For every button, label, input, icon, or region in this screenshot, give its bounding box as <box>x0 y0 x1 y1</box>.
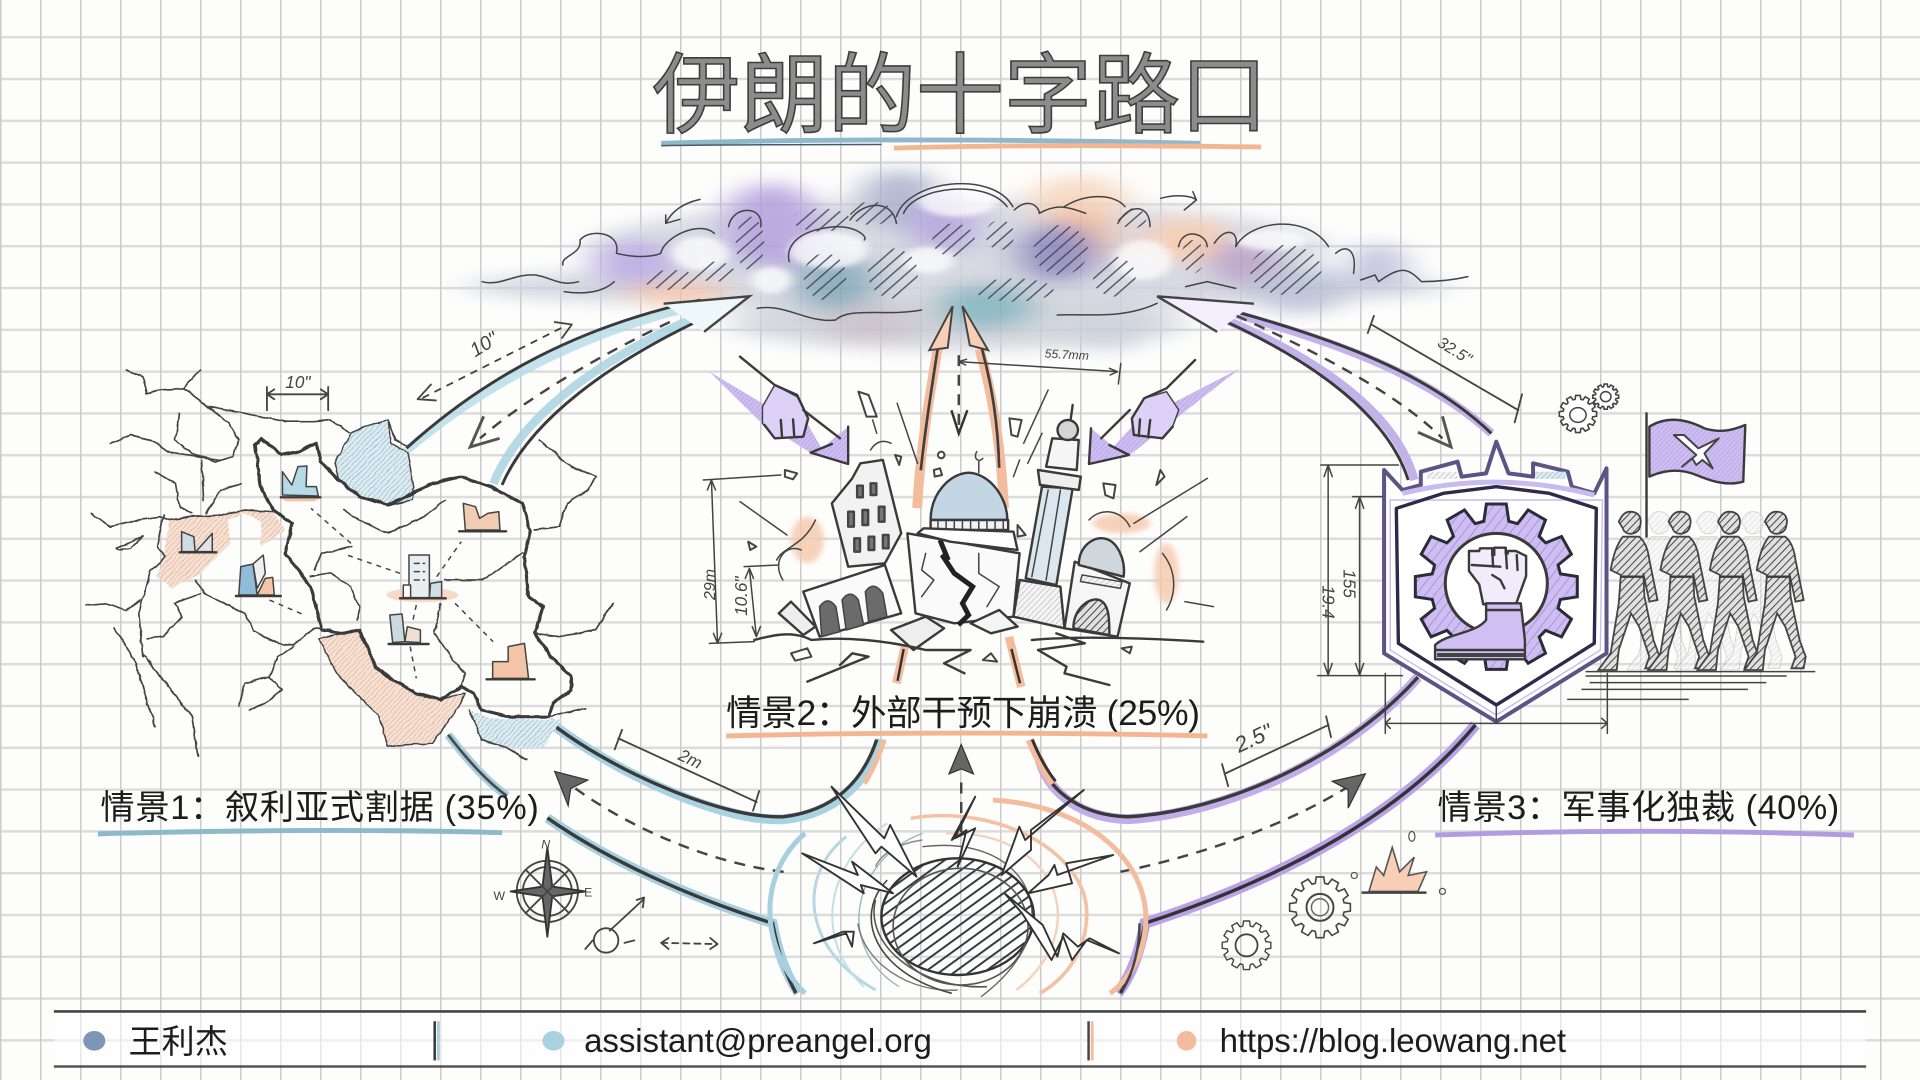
small explosion sketch <box>1351 831 1446 894</box>
top width dimension <box>958 359 1121 384</box>
ruined tower <box>832 460 901 567</box>
main dome <box>918 452 1018 550</box>
compass rose: W <box>493 889 505 903</box>
flag <box>1647 413 1745 537</box>
scenario 1 label: 情景1：叙利亚式割据 (35%) <box>100 789 539 827</box>
scenario 3 dimension labels: 19.4 <box>1318 585 1338 619</box>
ground lines <box>1568 672 1815 699</box>
dimension labels scenario 2: 10.6" <box>731 576 751 616</box>
region hatch: Gulf <box>318 630 465 747</box>
dimension labels around arrows: 2.5" <box>1230 718 1277 758</box>
arched hall <box>803 565 901 637</box>
shield <box>1384 442 1607 722</box>
small mosque <box>1064 538 1130 637</box>
region hatch: Oman <box>469 710 561 748</box>
footer: email: assistant@preangel.org <box>584 1023 932 1060</box>
small probe sketch and dashed arrow <box>585 898 718 953</box>
footer bar <box>54 1011 1866 1067</box>
compass rose <box>493 838 592 937</box>
rubble and ground cracks <box>748 390 1203 685</box>
gear emblem <box>1415 504 1577 669</box>
dimension labels scenario 2: 55.7mm <box>1044 347 1089 363</box>
central crisis core <box>770 787 1146 997</box>
scenario 3 dimension labels <box>1318 569 1359 619</box>
storm cloud at top <box>464 170 1468 350</box>
minaret <box>1026 405 1081 585</box>
internal flow arrows <box>269 508 493 678</box>
panel: scenario 2 collapsing mosque city <box>703 357 1240 685</box>
dimension labels around arrows: 10" <box>466 327 503 362</box>
Iran border <box>255 438 571 717</box>
dimension labels around arrows <box>267 316 1522 811</box>
dimension labels around arrows: 2m <box>675 744 705 773</box>
dashed flow arrows <box>470 316 1451 872</box>
right purple arrow and fist <box>1089 360 1240 464</box>
scenario 3 connector arrows (purple) <box>1040 296 1491 993</box>
compass rose: E <box>584 885 592 899</box>
pressure rings <box>770 800 1146 997</box>
marching soldiers <box>1598 512 1806 670</box>
scenario 2 label: 情景2：外部干预下崩溃 (25%) <box>726 693 1200 733</box>
title: 伊朗的十字路口 <box>652 46 1268 145</box>
dimension labels scenario 2: 29m <box>702 569 719 601</box>
footer: author: 王利杰 <box>129 1024 228 1061</box>
footer: website: https://blog.leowang.net <box>1220 1023 1566 1060</box>
scenario 2 connector arrows (orange) <box>864 306 1056 784</box>
region hatch: Caspian <box>335 420 414 505</box>
dimension labels around arrows: 10" <box>285 372 311 392</box>
scenario 3 label: 情景3：军事化独裁 (40%) <box>1438 789 1839 827</box>
panel: scenario 3 shield and marching soldiers <box>1318 384 1815 733</box>
dimension labels scenario 2 <box>702 347 1089 616</box>
dimension labels around arrows: 32.5" <box>1434 334 1475 369</box>
small gears <box>1559 384 1619 433</box>
orange blast clouds <box>791 513 1179 603</box>
city ruin icons <box>180 466 535 679</box>
central plaza block with crack <box>907 533 1020 625</box>
left purple arrow and fist <box>709 357 848 464</box>
footer: author <box>83 1024 228 1061</box>
decorative gears bottom right <box>1222 877 1350 970</box>
lower-right rubble wall <box>1013 580 1064 628</box>
panel: scenario 1 map of Iran <box>86 370 612 760</box>
neighbouring borders <box>86 370 612 760</box>
scenario 1 connector arrows (blue) <box>407 296 882 993</box>
region hatch: Syria <box>157 510 286 588</box>
hatched sphere <box>881 858 1034 975</box>
background ghost soldiers <box>1627 512 1782 670</box>
height dimensions <box>703 475 781 643</box>
shield dimensions <box>1318 465 1607 733</box>
lightning bolts <box>802 787 1119 960</box>
fist and boot <box>1435 548 1526 659</box>
compass rose: N <box>541 838 550 852</box>
scenario 3 dimension labels: 155 <box>1339 569 1359 598</box>
